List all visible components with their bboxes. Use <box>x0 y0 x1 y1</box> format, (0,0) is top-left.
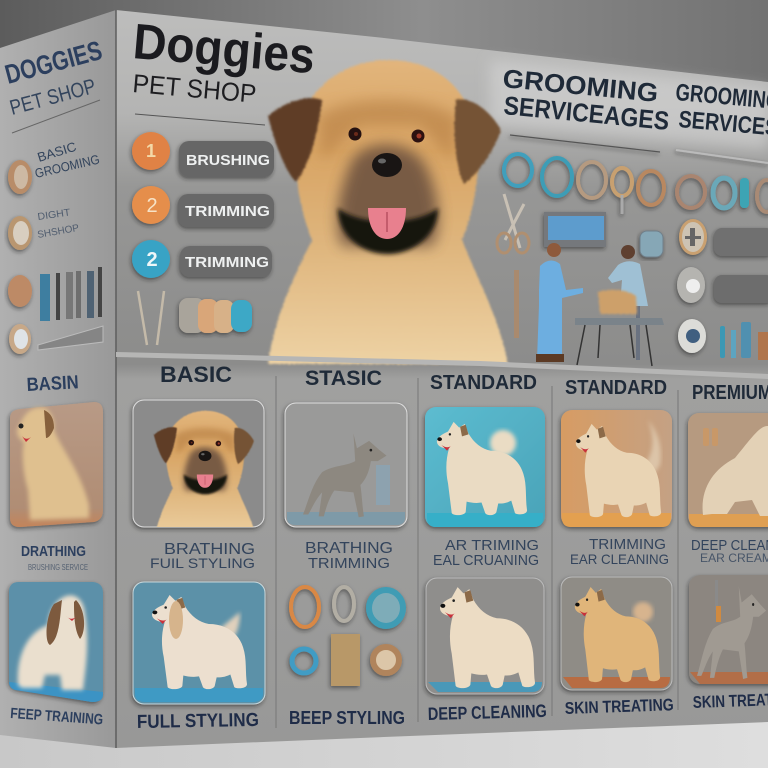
left panel title: DOGGIES <box>2 35 105 90</box>
left panel label: basic grooming: BASIC <box>35 139 78 165</box>
left panel subtitle: PET SHOP <box>7 75 98 120</box>
caption secondary: FUIL STYLING <box>150 555 255 571</box>
caption secondary: EAL CRUANING <box>433 552 539 569</box>
icon: knife <box>514 270 519 338</box>
left panel card: tan dog on brown <box>10 402 103 527</box>
step 1: brushing: BRUSHING <box>186 152 270 169</box>
card: cream dog on grey <box>426 578 544 694</box>
card: cream dog on orange <box>561 410 672 527</box>
left panel tool bars <box>40 267 102 321</box>
groomer left <box>536 243 583 362</box>
subtitle: PET SHOP <box>131 68 258 109</box>
caption: AR TRIMING <box>445 537 539 554</box>
right discs and plates <box>677 219 768 353</box>
column: standard one <box>425 372 547 724</box>
caption: TRIMMING <box>589 536 666 553</box>
card: fluffy dog on tan <box>688 413 768 527</box>
step 1: brushing: 1 <box>146 141 156 161</box>
card: puppy face <box>133 400 264 542</box>
left panel label: basic grooming <box>33 139 101 181</box>
column: premium <box>688 382 768 712</box>
floor <box>0 700 768 768</box>
step 2: trimming: TRIMMING <box>185 203 270 220</box>
step 3: trimming <box>132 240 272 278</box>
table <box>575 318 664 366</box>
card: cream dog on cyan <box>425 407 545 527</box>
column: stasic <box>285 367 407 728</box>
left panel label: dight shop: DIGHT <box>37 207 71 223</box>
caption bottom: BEEP STYLING <box>289 708 405 728</box>
card: grey dog <box>285 403 407 527</box>
dog on table <box>598 290 637 314</box>
tool rail: rings <box>504 135 664 214</box>
groomer right <box>608 245 648 360</box>
caption bottom: FULL STYLING <box>137 710 259 733</box>
icon: scissors <box>497 194 529 253</box>
tool rail: second rings <box>676 150 768 212</box>
column heading: STASIC <box>305 367 382 390</box>
caption secondary: TRIMMING <box>308 555 390 572</box>
left panel card: long-eared dog on blue <box>9 582 103 702</box>
column: basic <box>133 362 265 733</box>
card: grey slim dog <box>689 575 768 684</box>
heading: grooming services: GROOMING <box>501 63 660 108</box>
board corner edge <box>115 10 117 748</box>
column dividers <box>276 376 678 728</box>
right tools <box>720 322 768 360</box>
lower band top edge <box>116 352 768 379</box>
rule under subtitle <box>135 114 265 125</box>
step 3: trimming: 2 <box>146 249 158 271</box>
step 2: trimming: 2 <box>146 195 158 217</box>
left panel label: dight shop: SHSHOP <box>37 223 80 241</box>
left panel label: dight shop <box>37 207 80 241</box>
left panel caption: drathing: DRATHING <box>21 543 86 560</box>
service menu <box>132 132 274 345</box>
caption bottom: SKIN TREATING <box>564 695 674 718</box>
left panel label: basic grooming: GROOMING <box>33 151 101 181</box>
icon: blue brush <box>544 212 606 247</box>
left panel small plate <box>38 326 103 350</box>
caption: BRATHING <box>305 540 393 557</box>
column heading: BASIC <box>160 362 232 387</box>
left panel icon discs <box>8 160 32 354</box>
caption bottom: DEEP CLEANING <box>428 701 547 724</box>
step 3: trimming: TRIMMING <box>185 254 269 271</box>
heading: second grooming services <box>674 79 768 142</box>
icon: shears <box>138 291 164 345</box>
left panel heading: basin: BASIN <box>26 372 79 396</box>
left panel blurred caption: BRUSHING SERVICE <box>28 563 88 572</box>
caption: BRATHING <box>164 541 255 558</box>
icon: roller <box>179 298 252 333</box>
column: standard two <box>561 377 674 718</box>
left panel rule <box>12 100 100 133</box>
backdrop wall <box>0 0 768 400</box>
step 2: trimming <box>132 186 274 227</box>
icon set: rings and brushes <box>291 587 403 686</box>
hero dog illustration <box>268 60 508 364</box>
title: Doggies <box>131 13 317 84</box>
heading glow <box>490 60 768 150</box>
column heading: STANDARD <box>565 377 667 399</box>
step 1: brushing <box>132 132 274 177</box>
scene: groomers at table <box>536 243 664 366</box>
left panel caption: feep training: FEEP TRAINING <box>10 705 104 728</box>
caption secondary: EAR CLEANING <box>570 551 669 567</box>
card: golden dog <box>561 577 672 690</box>
column heading: STANDARD <box>430 372 537 394</box>
icon: bowl <box>640 231 663 257</box>
panel: left side face of display board <box>0 10 116 748</box>
heading: grooming services <box>501 63 671 136</box>
heading: grooming services: SERVICEAGES <box>502 90 671 136</box>
card: cream spaniel on teal <box>133 582 265 704</box>
